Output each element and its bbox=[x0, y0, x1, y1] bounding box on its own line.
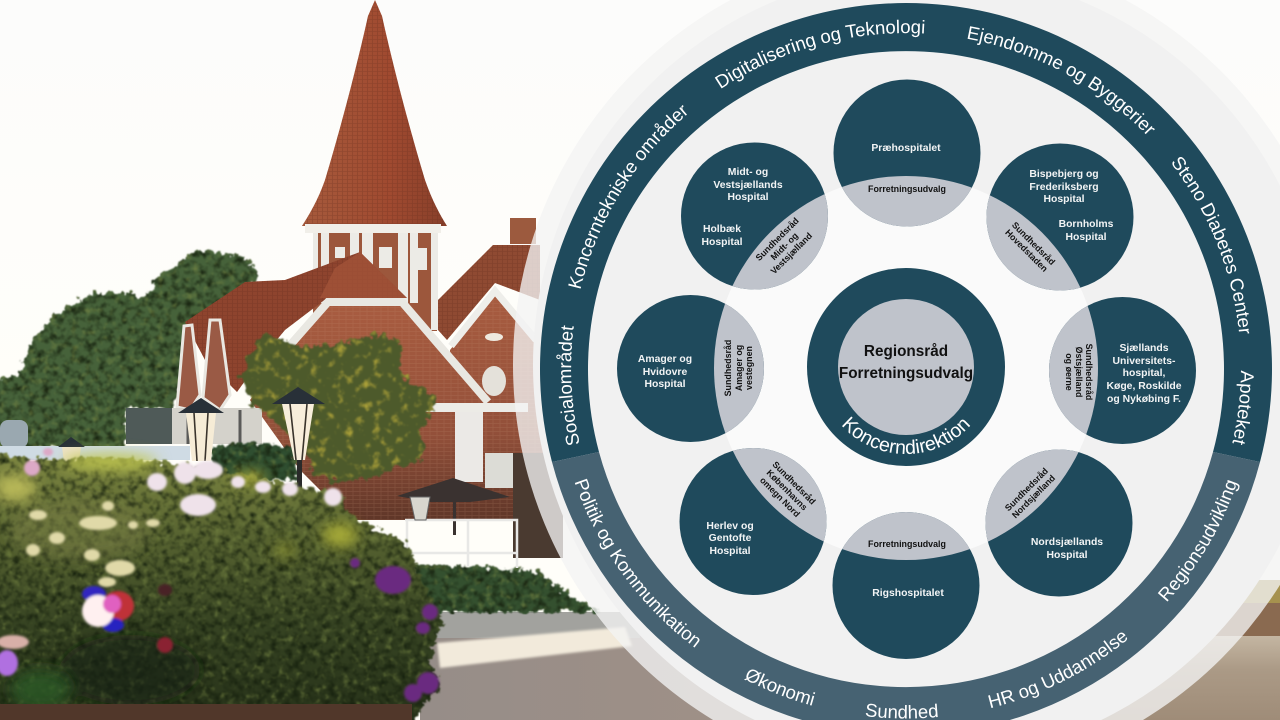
centre: Koncerndirektion ring bbox=[807, 268, 1005, 466]
right large lamp bbox=[272, 387, 325, 460]
fence bbox=[405, 520, 517, 568]
satellite: Rigshospitalet bbox=[832, 512, 980, 659]
satellite: Herlev og Gentofte Hospital: Herlev og bbox=[706, 521, 754, 532]
centre: Regionsråd disc bbox=[838, 299, 974, 435]
satellite: Amager og Hvidovre Hospital: Amager og bbox=[734, 345, 744, 391]
satellite: Herlev og Gentofte Hospital: Sundhedsråd bbox=[770, 459, 818, 507]
satellite: Herlev og Gentofte Hospital: Københavns bbox=[765, 468, 809, 512]
satellite: Sjællands Universitetshospital: hospital, bbox=[1123, 368, 1165, 379]
satellite: Sjællands Universitetshospital: og øerne bbox=[1064, 353, 1074, 391]
planter edge bbox=[0, 704, 412, 720]
label: Regionsudvikling: Regionsudvikling bbox=[1158, 480, 1240, 602]
label: Apoteket: Apoteket bbox=[1232, 370, 1254, 445]
background machinery and wall bbox=[0, 408, 190, 460]
label: Økonomi: Økonomi bbox=[744, 670, 816, 706]
satellite: Præhospitalet: Forretningsudvalg bbox=[868, 184, 946, 194]
satellite: Bispebjerg og Frederiksberg Hospital: Bispebjerg og bbox=[1029, 169, 1099, 180]
tower bbox=[305, 224, 441, 331]
satellite: Bispebjerg og Frederiksberg Hospital bbox=[986, 144, 1134, 290]
satellite: Herlev og Gentofte Hospital: Hospital bbox=[710, 546, 751, 557]
right wing: chimney, roof, gable bbox=[438, 218, 545, 520]
diagram: outer ring of staff functions bbox=[540, 3, 1272, 720]
label: Koncerntekniske områder: Koncerntekniske områder bbox=[568, 105, 687, 288]
satellite: Herlev og Gentofte Hospital: omegn Nord bbox=[758, 475, 802, 519]
small far lamp bbox=[58, 437, 85, 462]
blossoms bbox=[0, 448, 439, 702]
trees left bbox=[0, 250, 261, 450]
satellite: Amager og Hvidovre Hospital: vestegnen bbox=[744, 346, 754, 390]
lamp post bbox=[297, 458, 302, 490]
lens flare bbox=[82, 586, 134, 632]
pavement bbox=[420, 580, 1280, 720]
satellite: Nordsjællands Hospital: Sundhedsråd bbox=[1003, 466, 1050, 513]
lens flare small bbox=[0, 650, 18, 676]
sunlit foliage patches bbox=[0, 454, 358, 710]
satellite: Sjællands Universitetshospital: Sundhedsråd bbox=[1084, 344, 1094, 400]
satellite: Midt- og Vestsjællands Hospital: Vestsjællands bbox=[713, 180, 783, 191]
satellite: Amager og Hvidovre Hospital: Sundhedsråd bbox=[723, 340, 733, 396]
label: Ejendomme og Byggerier: Ejendomme og Byggerier bbox=[968, 26, 1155, 134]
satellite: Amager og Hvidovre Hospital: Amager og bbox=[638, 354, 692, 365]
satellite: Bispebjerg og Frederiksberg Hospital: Sundhedsråd bbox=[1010, 220, 1057, 267]
small lamp right bbox=[410, 497, 430, 520]
translucent outer disc bbox=[513, 0, 1280, 720]
satellite: Herlev og Gentofte Hospital: Gentofte bbox=[709, 533, 752, 544]
satellite: Nordsjællands Hospital bbox=[986, 450, 1132, 596]
dark hedge behind lamps bbox=[205, 442, 298, 480]
satellite: Amager og Hvidovre Hospital bbox=[617, 295, 764, 442]
satellite: Nordsjællands Hospital: Nordsjællands bbox=[1031, 537, 1103, 548]
satellite: Bispebjerg og Frederiksberg Hospital: Bornholms bbox=[1059, 219, 1114, 230]
satellite: Midt- og Vestsjællands Hospital: Hospital bbox=[702, 237, 743, 248]
yellow-green tree in front bbox=[240, 333, 437, 483]
satellite: Rigshospitalet: Rigshospitalet bbox=[872, 588, 944, 599]
centre heading: Forretningsudvalg: Forretningsudvalg bbox=[839, 365, 973, 382]
label: Politik og Kommunikation: Politik og Kommunikation bbox=[574, 478, 700, 648]
satellite: Præhospitalet bbox=[834, 80, 980, 226]
satellite: Præhospitalet: Præhospitalet bbox=[871, 143, 941, 154]
satellite: Midt- og Vestsjællands Hospital: Vestsjælland bbox=[769, 231, 814, 276]
opaque pale disc bbox=[533, 0, 1280, 720]
central light disc bbox=[714, 176, 1098, 560]
satellite: Sjællands Universitetshospital: Køge, Roskilde bbox=[1106, 381, 1182, 392]
spire roof bbox=[302, 0, 447, 226]
satellite: Midt- og Vestsjællands Hospital: Holbæk bbox=[703, 224, 741, 235]
satellite: Bispebjerg og Frederiksberg Hospital: Frederiksberg bbox=[1029, 182, 1099, 193]
dark lattice at right bbox=[513, 453, 563, 558]
label: Digitalisering og Teknologi: Digitalisering og Teknologi bbox=[714, 20, 924, 88]
satellite: Sjællands Universitetshospital bbox=[1049, 297, 1196, 444]
satellite: Sjællands Universitetshospital: Sjællands bbox=[1119, 343, 1169, 354]
label: HR og Uddannelse: HR og Uddannelse bbox=[988, 632, 1128, 708]
label: Socialområdet: Socialområdet bbox=[556, 325, 579, 445]
satellite: Midt- og Vestsjællands Hospital: Sundhedsråd bbox=[754, 216, 801, 263]
ring: lighter lower segment bbox=[552, 452, 1260, 720]
satellite: Rigshospitalet: Forretningsudvalg bbox=[868, 539, 946, 549]
satellite: Midt- og Vestsjællands Hospital: Midt- og bbox=[769, 231, 800, 262]
satellite: Amager og Hvidovre Hospital: Hospital bbox=[644, 379, 686, 390]
umbrella bbox=[397, 478, 510, 535]
ring: dark upper segment bbox=[540, 3, 1272, 462]
satellite: Bispebjerg og Frederiksberg Hospital: Hospital bbox=[1066, 232, 1107, 243]
satellite: Midt- og Vestsjællands Hospital bbox=[681, 142, 828, 290]
main roof bbox=[185, 252, 407, 392]
satellite: Herlev og Gentofte Hospital bbox=[680, 448, 826, 595]
main brick gable bbox=[250, 302, 528, 520]
flowering bush foreground bbox=[0, 450, 443, 720]
satellite: Sjællands Universitetshospital: Universitets- bbox=[1113, 356, 1176, 367]
left large lamp bbox=[178, 398, 224, 461]
satellite: Amager og Hvidovre Hospital: Hvidovre bbox=[643, 367, 687, 378]
satellite: Bispebjerg og Frederiksberg Hospital: Hospital bbox=[1044, 194, 1085, 205]
satellite: Nordsjællands Hospital: Nordsjælland bbox=[1010, 473, 1057, 520]
label: Steno Diabetes Center: Steno Diabetes Center bbox=[1172, 157, 1250, 334]
hedge behind pavement bbox=[415, 566, 600, 612]
satellite: Nordsjællands Hospital: Hospital bbox=[1046, 550, 1088, 561]
satellite: Sjællands Universitetshospital: Østsjælland bbox=[1074, 347, 1084, 397]
centre label: Koncerndirektion: Koncerndirektion bbox=[842, 416, 970, 454]
centre heading: Regionsråd: Regionsråd bbox=[864, 343, 948, 360]
satellite: Bispebjerg og Frederiksberg Hospital: Hovedstaden bbox=[1003, 227, 1050, 274]
satellite: Midt- og Vestsjællands Hospital: Midt- og bbox=[728, 167, 768, 178]
satellite: Sjællands Universitetshospital: og Nykøbing F. bbox=[1107, 394, 1181, 405]
satellite: Midt- og Vestsjællands Hospital: Hospital bbox=[728, 192, 769, 203]
dormers bbox=[172, 320, 262, 444]
